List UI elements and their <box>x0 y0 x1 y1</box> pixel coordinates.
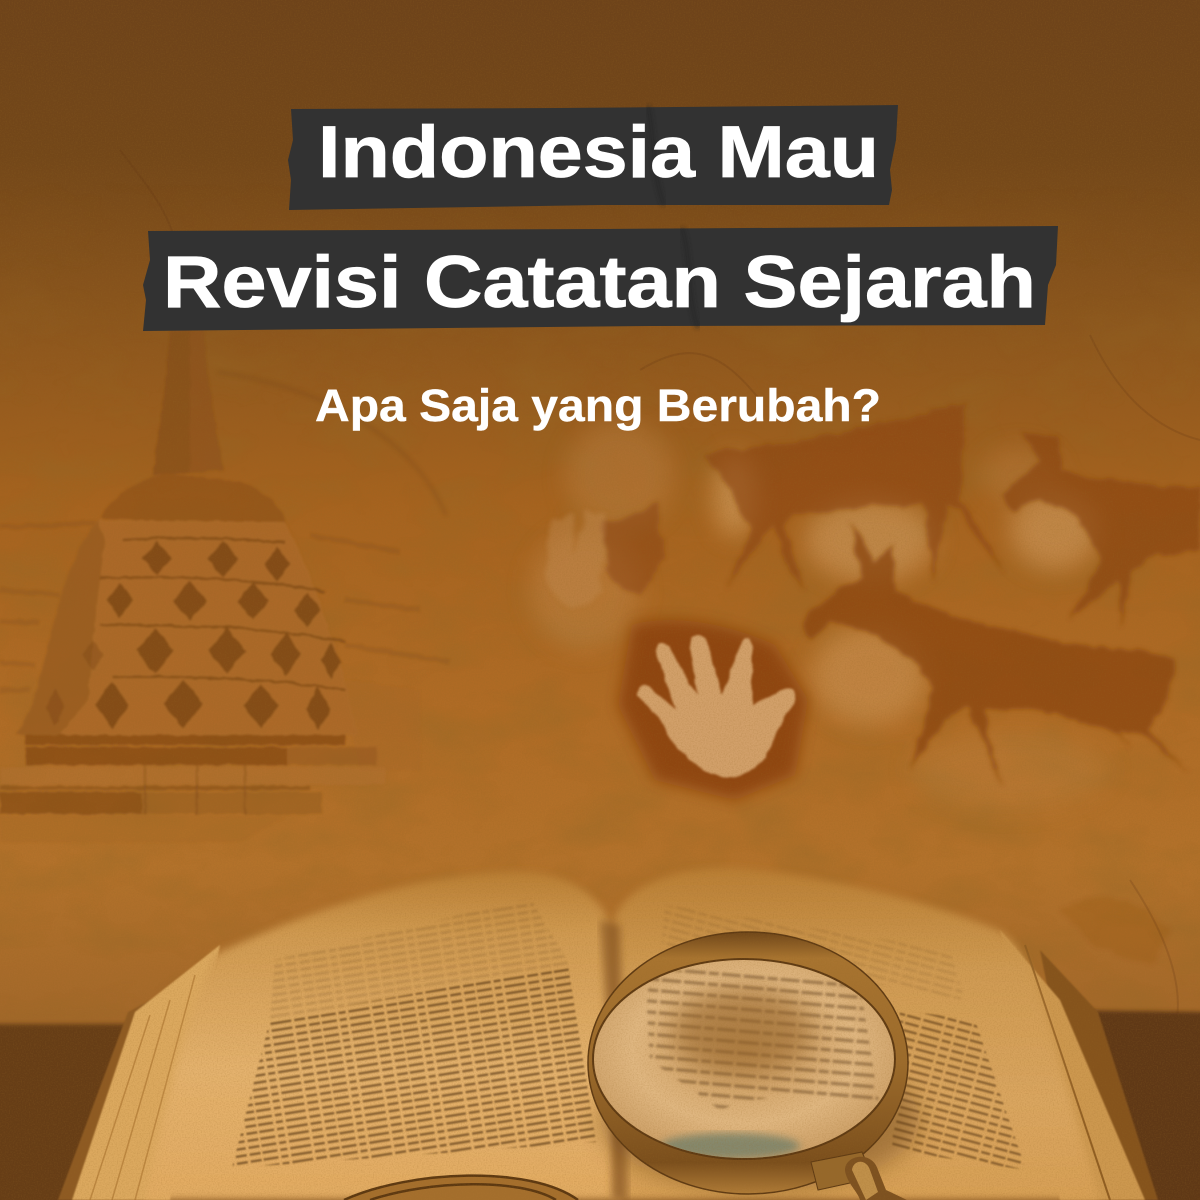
stupa body <box>15 520 358 735</box>
title strip: line 2 <box>143 226 1058 331</box>
hand stencil: red surround <box>618 620 808 800</box>
tape shape <box>288 105 898 210</box>
lens contents <box>645 968 880 1159</box>
illustration: cave painting handprints <box>545 500 808 800</box>
illustration: open book <box>58 868 1158 1200</box>
right page faint text block <box>660 905 965 1000</box>
title line 2 text: Revisi Catatan Sejarah <box>163 242 1036 323</box>
tape crease <box>648 106 664 205</box>
animal: right deer <box>1002 432 1200 628</box>
illustration: cave light patches <box>530 420 1110 810</box>
title line 1 text: Indonesia Mau <box>318 112 879 193</box>
background mottled wall <box>77 620 1200 933</box>
hand stencil: upper faint <box>545 500 665 608</box>
dark table surface <box>0 1010 1200 1200</box>
lens rim <box>588 932 908 1194</box>
right page stack <box>1000 930 1145 1200</box>
icon: magnifying glass <box>588 932 920 1200</box>
illustration: cave painting animals <box>705 402 1200 965</box>
stupa crown <box>100 473 287 528</box>
left page <box>145 872 620 1200</box>
tape shape <box>143 226 1058 331</box>
animal: upper deer <box>705 402 1006 592</box>
stupa spire <box>153 330 224 475</box>
book spine shadow <box>600 920 628 1200</box>
left page stack <box>72 945 220 1200</box>
title strip: line 1 <box>288 105 898 210</box>
animal: faded far right <box>1060 898 1170 965</box>
glass shadow <box>600 1050 920 1190</box>
subtitle: Apa Saja yang Berubah? <box>315 380 881 431</box>
cave wall cracks <box>120 150 1200 1040</box>
tape crease <box>682 228 698 328</box>
stupa diamond openings <box>45 541 341 731</box>
right page <box>612 868 1100 1200</box>
animal: large deer <box>802 520 1190 790</box>
bottom page curl <box>344 1176 578 1200</box>
magnifier handle collar <box>811 1152 873 1190</box>
left page text block <box>232 965 597 1168</box>
stupa base terraces <box>25 735 345 745</box>
stupa side terraces <box>0 523 450 690</box>
hand: light palm <box>637 634 795 778</box>
left page faint heading block <box>270 898 570 1020</box>
illustration: Borobudur stupa <box>0 330 450 842</box>
right page text block <box>892 1010 1026 1170</box>
book cover edges <box>58 990 170 1200</box>
spire side sweep <box>218 372 446 515</box>
lens <box>593 959 895 1159</box>
magnifier handle <box>845 1157 907 1200</box>
